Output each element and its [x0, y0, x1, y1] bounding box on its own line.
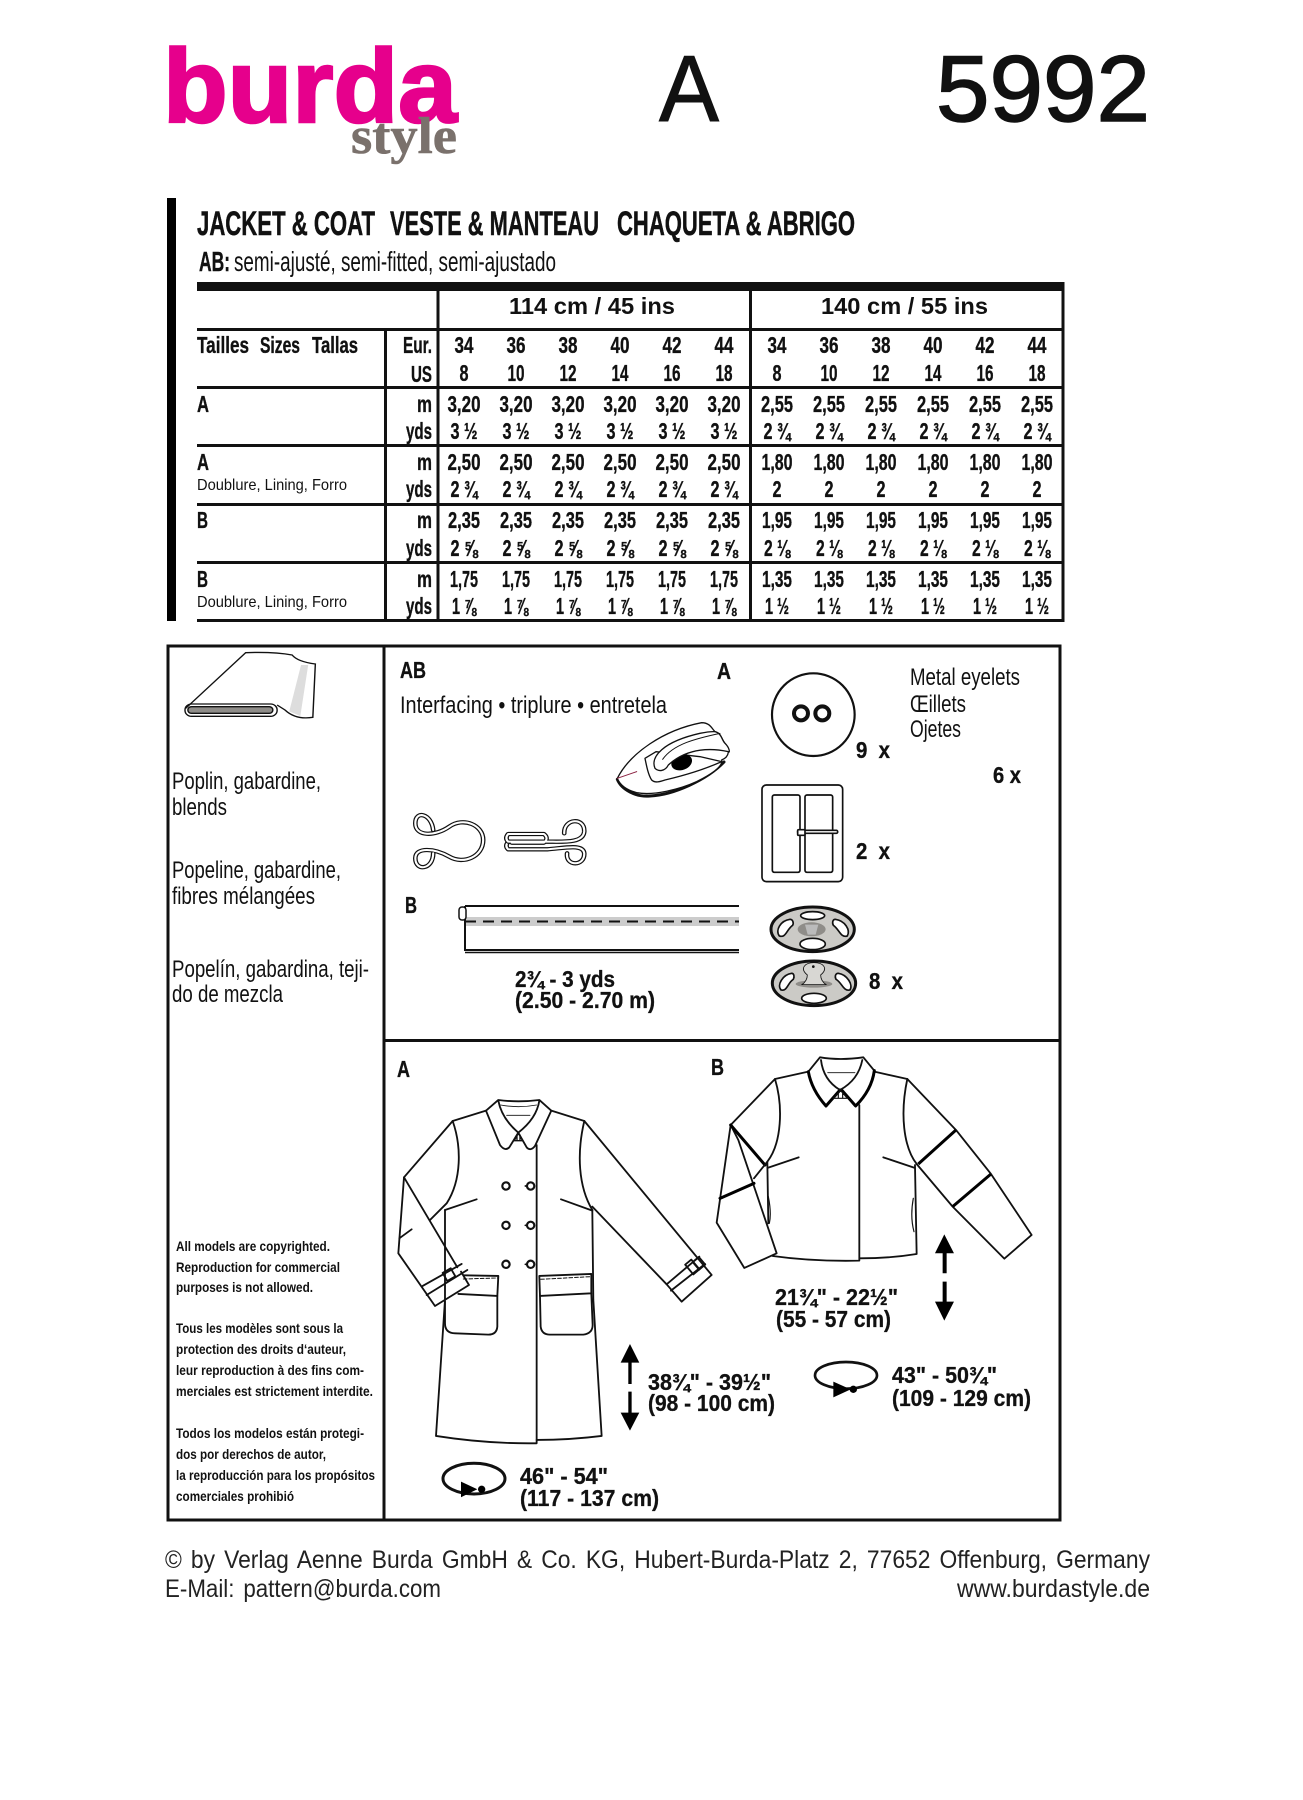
text: jacket width	[892, 1362, 1031, 1411]
table values 140 cm: 14	[924, 360, 942, 386]
table values 140 cm: 1,95	[970, 507, 1000, 533]
table values 140 cm: 1 ½	[1025, 593, 1049, 619]
table values 114 cm: 2,50	[552, 449, 584, 475]
table values 114 cm: 3,20	[656, 391, 688, 417]
table values 140 cm: 1,35	[918, 566, 948, 592]
row labels: m	[417, 449, 432, 475]
text: coat width: (117 - 137 cm)	[520, 1485, 659, 1511]
table values 114 cm: 40	[610, 332, 630, 358]
table values 114 cm: 1 ⅞	[608, 593, 633, 619]
text: fabric suggestions: Poplin, gabardine,	[172, 768, 321, 795]
table values 114 cm: 2,50	[448, 449, 480, 475]
subtitle: fit: semi-ajusté, semi-fitted, semi-ajustado	[234, 246, 556, 277]
jacket body	[754, 1072, 917, 1261]
table values 140 cm: 2,55	[1021, 391, 1053, 417]
text: tape length: 2¾ - 3 yds	[515, 966, 615, 992]
text: metal eyelets: Metal eyelets	[910, 664, 1020, 691]
title: VESTE & MANTEAU	[390, 205, 599, 243]
table values 140 cm: 2,55	[865, 391, 897, 417]
subtitle: fit: AB:	[199, 246, 230, 277]
interfacing label: Interfacing • triplure • entretela	[400, 692, 668, 719]
table values 114 cm: 3,20	[604, 391, 636, 417]
row labels: m	[417, 391, 432, 417]
table values 114 cm: 2,50	[708, 449, 740, 475]
table values 114 cm: 2 ¾	[554, 476, 583, 502]
text: coat length: 38¾" - 39½"	[648, 1369, 771, 1395]
row labels: yds	[406, 476, 432, 502]
table values 140 cm: 1 ½	[817, 593, 841, 619]
notions heading AB: AB	[400, 657, 426, 683]
table values 114 cm: 1 ⅞	[660, 593, 685, 619]
title	[197, 205, 855, 243]
coat buttons	[502, 1182, 534, 1268]
table values 140 cm: 1,80	[970, 449, 1000, 475]
text: coat width: 46" - 54"	[520, 1463, 608, 1489]
view label A: A	[397, 1056, 410, 1082]
table values 114 cm: 3 ½	[554, 418, 582, 444]
row labels: m	[417, 566, 432, 592]
table values 114 cm: 8	[460, 360, 469, 386]
pattern number: 5992	[936, 36, 1150, 141]
table values 114 cm: 2 ⅝	[450, 535, 479, 561]
table values 114 cm: 34	[454, 332, 474, 358]
row labels: B	[197, 507, 208, 533]
table values 114 cm: 1 ⅞	[452, 593, 477, 619]
table values 140 cm: 2,55	[917, 391, 949, 417]
text: metal eyelets: Ojetes	[910, 716, 961, 743]
table values 140 cm: 2	[876, 476, 886, 502]
illustration: coat A	[398, 1100, 712, 1443]
table values 114 cm: 1 ⅞	[556, 593, 581, 619]
table values 114 cm: 2 ¾	[450, 476, 479, 502]
vertical black bar	[167, 198, 176, 621]
footer: publisher address: © by Verlag Aenne Burda GmbH & Co. KG, Hubert-Burda-Platz 2, 77652 Offenburg, Germany	[165, 1546, 1150, 1574]
view letter A: A	[659, 36, 719, 141]
table values 114 cm: 2 ¾	[502, 476, 531, 502]
table values 140 cm: 2,55	[813, 391, 845, 417]
table values 114 cm: 2 ⅝	[658, 535, 687, 561]
text: copyright notice: comerciales prohibió	[176, 1488, 294, 1504]
arrow: jacket length	[935, 1234, 954, 1321]
table values 114 cm: 2,35	[708, 507, 740, 533]
row labels: Sizes	[260, 332, 300, 358]
icon: fabric bolt	[185, 652, 315, 718]
table values 114 cm: 14	[612, 360, 629, 386]
table values 114 cm: 2 ⅝	[606, 535, 635, 561]
table width headers	[509, 293, 988, 319]
subtitle: fit	[199, 246, 556, 277]
text: copyright notice: purposes is not allowed.	[176, 1279, 313, 1295]
table values 140 cm: 2	[928, 476, 938, 502]
table values 114 cm: 1 ⅞	[504, 593, 529, 619]
table values 140 cm: 2 ⅛	[764, 535, 791, 561]
icon: hook and eye	[415, 815, 584, 867]
table values 140 cm: 1,35	[970, 566, 1000, 592]
text: copyright notice: merciales est strictement interdite.	[176, 1383, 373, 1399]
table values 140 cm: 1,95	[814, 507, 844, 533]
icon: coat width loop	[443, 1463, 505, 1497]
icon: jacket width loop	[815, 1362, 877, 1397]
text: jacket width: 43" - 50¾"	[892, 1362, 997, 1388]
table values 140 cm: 2 ⅛	[868, 535, 895, 561]
table values 114 cm: 1,75	[658, 566, 686, 592]
table values 140 cm: 1 ½	[869, 593, 893, 619]
text: jacket length	[775, 1284, 898, 1332]
table values 114 cm: 2,35	[656, 507, 688, 533]
table values 140 cm: 10	[820, 360, 838, 386]
arrow: coat length	[621, 1344, 639, 1431]
text: coat width	[520, 1463, 659, 1511]
table values 140 cm: 1,80	[1022, 449, 1052, 475]
table width headers: 114 cm / 45 ins	[509, 293, 675, 319]
table width headers: 140 cm / 55 ins	[821, 293, 988, 319]
jacket sleeves	[717, 1079, 1032, 1268]
table values 140 cm: 1 ½	[973, 593, 997, 619]
table values 140 cm: 8	[772, 360, 782, 386]
text: tape length	[515, 966, 655, 1013]
table values 140 cm: 42	[976, 332, 994, 358]
table values 140 cm: 2 ¾	[972, 418, 1000, 444]
table values 114 cm: 2,35	[448, 507, 480, 533]
table values 114 cm: 2 ¾	[658, 476, 687, 502]
table values 114 cm: 36	[506, 332, 526, 358]
table values 140 cm: 2,55	[761, 391, 793, 417]
table values 140 cm: 1,35	[1022, 566, 1052, 592]
text: copyright notice	[176, 1238, 375, 1504]
view label B: B	[711, 1054, 724, 1080]
table values 114 cm: 1,75	[502, 566, 530, 592]
coat pockets	[445, 1274, 593, 1335]
title: CHAQUETA & ABRIGO	[617, 205, 855, 243]
table values 140 cm: 2 ¾	[816, 418, 844, 444]
table values 140 cm: 1,80	[814, 449, 844, 475]
table values 140 cm: 38	[872, 332, 891, 358]
table grid	[197, 282, 1064, 622]
table values 140 cm: 18	[1028, 360, 1046, 386]
row labels: Doublure, Lining, Forro	[197, 594, 347, 611]
table values 114 cm: 18	[716, 360, 733, 386]
table values 114 cm: 1,75	[710, 566, 738, 592]
row labels: yds	[406, 535, 432, 561]
coat sleeves	[398, 1121, 712, 1306]
table values 114 cm: 2,50	[656, 449, 688, 475]
table values 140 cm: 1,80	[762, 449, 792, 475]
text: fabric suggestions: fibres mélangées	[172, 883, 315, 910]
table values 140 cm: 1,95	[762, 507, 792, 533]
icon: iron	[617, 723, 729, 796]
footer: website: www.burdastyle.de	[956, 1575, 1150, 1603]
table values 140 cm: 1,35	[866, 566, 896, 592]
table values 114 cm: 1,75	[606, 566, 634, 592]
text: fabric suggestions: blends	[172, 794, 227, 821]
table values 140 cm: 2	[824, 476, 834, 502]
table values 140 cm: 2 ⅛	[972, 535, 999, 561]
jacket collar	[808, 1057, 874, 1106]
row labels: Eur.	[403, 332, 432, 358]
label: buckle quantity: 2 x	[856, 838, 890, 864]
yardage table	[197, 282, 1064, 622]
table values 114 cm: 2,50	[604, 449, 636, 475]
table values 140 cm: 36	[820, 332, 838, 358]
label: button quantity: 9 x	[856, 737, 890, 763]
text: copyright notice: leur reproduction à des fins com-	[176, 1362, 364, 1378]
table values 140 cm: 1,35	[814, 566, 844, 592]
table values 114 cm: 3 ½	[606, 418, 634, 444]
table values 114 cm: 2,35	[500, 507, 532, 533]
text: coat length	[648, 1369, 775, 1416]
icon: zipper tape	[459, 906, 739, 952]
table values 140 cm: 1 ½	[921, 593, 945, 619]
table values 140 cm: 2	[980, 476, 990, 502]
panel frame	[168, 646, 1060, 1520]
table values 114 cm: 2,50	[500, 449, 532, 475]
table values 140 cm: 2 ⅛	[920, 535, 947, 561]
text: jacket length: 21¾" - 22½"	[775, 1284, 898, 1310]
text: copyright notice: Todos los modelos están protegi-	[176, 1425, 364, 1441]
table values 114 cm: 2 ⅝	[710, 535, 739, 561]
table values 140 cm: 1,35	[762, 566, 792, 592]
text: metal eyelets	[910, 664, 1020, 743]
notions heading A: A	[717, 658, 731, 684]
table values 114 cm: 44	[714, 332, 734, 358]
table values 114 cm: 2 ¾	[710, 476, 739, 502]
icon: button	[772, 673, 855, 756]
table values 114 cm: 3,20	[448, 391, 480, 417]
text: jacket width: (109 - 129 cm)	[892, 1385, 1031, 1411]
table values 114 cm: 1,75	[554, 566, 582, 592]
row labels: yds	[406, 593, 432, 619]
footer: email: E-Mail: pattern@burda.com	[165, 1575, 441, 1603]
text: fabric suggestions: Popelín, gabardina, teji-	[172, 956, 369, 983]
row labels: yds	[406, 418, 432, 444]
table values 114 cm: 3 ½	[658, 418, 686, 444]
logo: burda style: style	[351, 108, 457, 165]
table values 114 cm: 1,75	[450, 566, 478, 592]
row labels: B	[197, 566, 208, 592]
table values 140 cm: 2	[1032, 476, 1042, 502]
table values 140 cm: 2 ¾	[868, 418, 896, 444]
text: fabric suggestions	[172, 768, 369, 1008]
text: copyright notice: Reproduction for commercial	[176, 1259, 340, 1275]
row labels: Doublure, Lining, Forro	[197, 477, 347, 494]
table values 114 cm: 2,35	[552, 507, 584, 533]
table values 114 cm: 2,35	[604, 507, 636, 533]
illustration: jacket B	[717, 1057, 1032, 1268]
table values 114 cm: 38	[558, 332, 578, 358]
table values 140 cm: 2	[772, 476, 782, 502]
table values 140 cm: 44	[1028, 332, 1047, 358]
icon: buckle	[762, 785, 843, 882]
row labels: A	[197, 391, 209, 417]
table values 114 cm: 2 ⅝	[554, 535, 583, 561]
table values 140 cm: 2 ¾	[1024, 418, 1052, 444]
text: tape length: (2.50 - 2.70 m)	[515, 987, 655, 1013]
text: fabric suggestions: do de mezcla	[172, 981, 284, 1008]
table values 140 cm: 12	[872, 360, 890, 386]
table values 140 cm: 2 ¾	[764, 418, 792, 444]
table values 140 cm: 1,95	[918, 507, 948, 533]
table values 140 cm: 1,95	[1022, 507, 1052, 533]
label: eyelet quantity: 6 x	[993, 762, 1021, 788]
table values 114 cm: 3,20	[552, 391, 584, 417]
table values 114 cm: 1 ⅞	[712, 593, 737, 619]
title: JACKET & COAT	[197, 205, 375, 243]
label: snaps quantity: 8 x	[869, 968, 903, 994]
table values 140 cm: 40	[924, 332, 942, 358]
table values 140 cm: 1,80	[918, 449, 948, 475]
table values 114 cm: 3 ½	[502, 418, 530, 444]
text: copyright notice: dos por derechos de autor,	[176, 1446, 326, 1462]
table values 114 cm: 2 ⅝	[502, 535, 531, 561]
text: copyright notice: protection des droits d‘auteur,	[176, 1341, 346, 1357]
table values 114 cm: 42	[662, 332, 682, 358]
table values 140 cm: 16	[976, 360, 994, 386]
table values 140 cm: 34	[768, 332, 787, 358]
row labels: Tallas	[312, 332, 358, 358]
text: metal eyelets: Œillets	[910, 691, 966, 718]
row labels: US	[411, 361, 432, 387]
table values 140 cm: 2 ⅛	[816, 535, 843, 561]
table values 114 cm	[448, 332, 740, 619]
table values 114 cm: 3,20	[708, 391, 740, 417]
table values 114 cm: 3,20	[500, 391, 532, 417]
logo: burda style: burda	[163, 29, 458, 145]
row labels: A	[197, 449, 209, 475]
table values 140 cm	[761, 332, 1053, 619]
row labels	[197, 332, 432, 619]
text: copyright notice: Tous les modèles sont sous la	[176, 1320, 343, 1336]
table values 114 cm: 10	[508, 360, 524, 386]
table values 140 cm: 2 ⅛	[1024, 535, 1051, 561]
coat collar	[486, 1100, 551, 1149]
table values 140 cm: 1,80	[866, 449, 896, 475]
table values 140 cm: 2 ¾	[920, 418, 948, 444]
table values 114 cm: 16	[664, 360, 680, 386]
row labels: Tailles	[197, 332, 249, 358]
text: fabric suggestions: Popeline, gabardine,	[172, 857, 341, 884]
table values 140 cm: 1 ½	[765, 593, 789, 619]
table values 114 cm: 2 ¾	[606, 476, 635, 502]
table values 114 cm: 3 ½	[710, 418, 738, 444]
table values 114 cm: 12	[560, 360, 576, 386]
table values 114 cm: 3 ½	[450, 418, 478, 444]
row labels: m	[417, 507, 432, 533]
table values 140 cm: 1,95	[866, 507, 896, 533]
table values 140 cm: 2,55	[969, 391, 1001, 417]
icon: snap fasteners	[771, 907, 856, 1006]
text: copyright notice: All models are copyrighted.	[176, 1238, 330, 1254]
text: coat length: (98 - 100 cm)	[648, 1390, 775, 1416]
text: jacket length: (55 - 57 cm)	[776, 1306, 891, 1332]
text: copyright notice: la reproducción para los propósitos	[176, 1467, 375, 1483]
coat body	[430, 1111, 602, 1443]
notions heading B: B	[405, 892, 417, 918]
